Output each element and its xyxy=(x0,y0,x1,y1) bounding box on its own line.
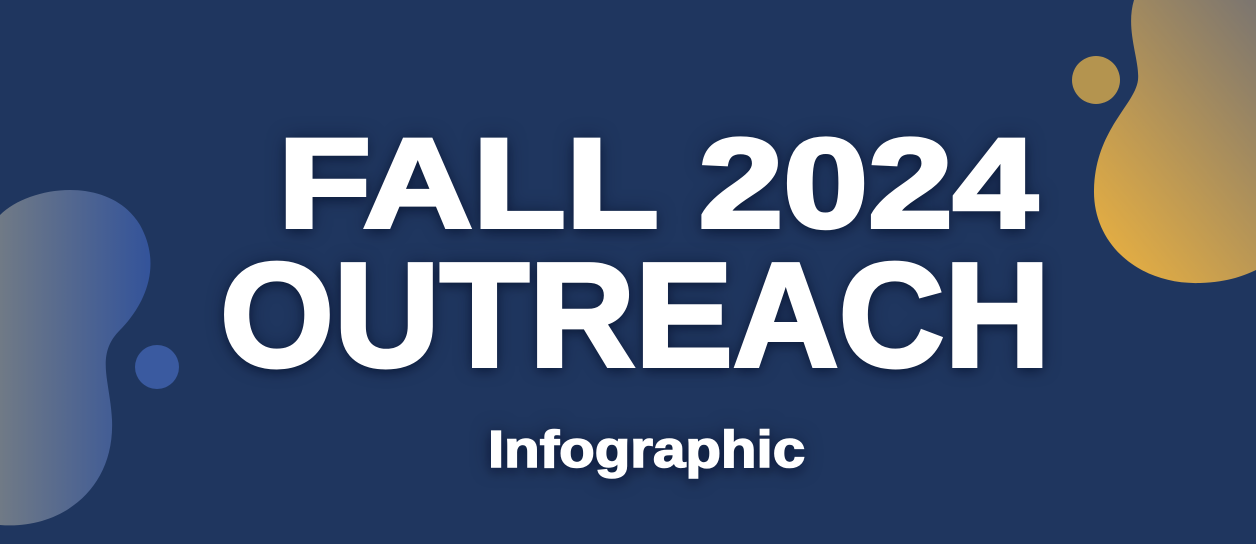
blob: left xyxy=(0,190,150,525)
subtitle: Infographic xyxy=(488,421,805,479)
blob: right xyxy=(1094,0,1256,283)
title line 2: OUTREACH xyxy=(220,233,1050,398)
dot: right xyxy=(1072,56,1120,104)
title line 1: FALL 2024 xyxy=(278,112,1038,254)
dot: left xyxy=(135,345,179,389)
